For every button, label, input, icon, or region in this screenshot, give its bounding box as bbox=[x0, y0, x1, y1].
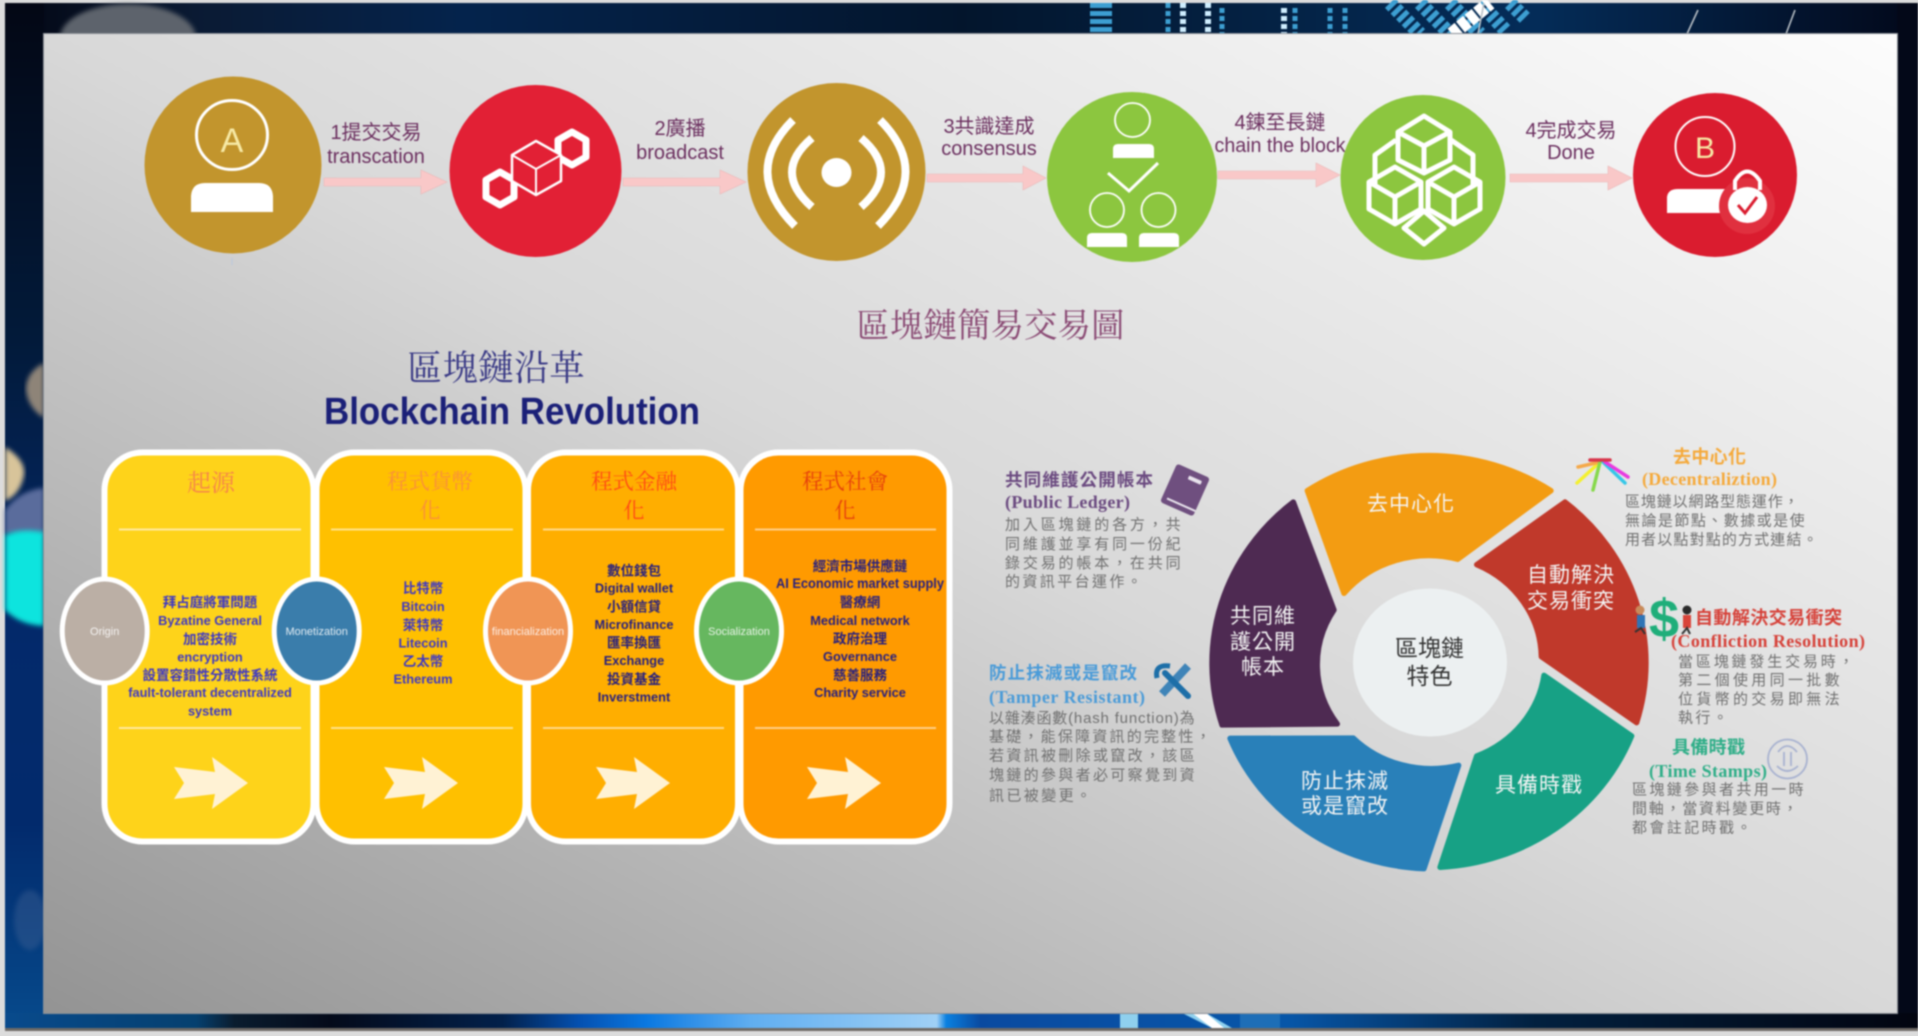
label: step 2 bbox=[636, 117, 724, 164]
text block: decentralization bbox=[1625, 447, 1820, 548]
arrow 4 bbox=[1218, 163, 1340, 187]
card: origin: Byzatine General bbox=[158, 613, 262, 628]
text block: conflict resolution: 位貨幣的交易即無法 bbox=[1678, 690, 1842, 708]
icon: dollar sign with figures: $ bbox=[1649, 589, 1679, 649]
text block: time stamps: 具備時戳 bbox=[1672, 738, 1745, 758]
icon: book bbox=[1160, 463, 1210, 517]
label: step 3: consensus bbox=[941, 138, 1037, 160]
card: socialization: 化 bbox=[834, 499, 856, 523]
node: origin: Origin bbox=[90, 626, 119, 638]
card: monetization: Ethereum bbox=[393, 672, 453, 686]
heading: Blockchain Revolution: 區塊鏈沿革 bbox=[407, 348, 585, 388]
step icon: broadcast bbox=[748, 83, 926, 261]
card: origin: encryption bbox=[177, 650, 243, 664]
text block: time stamps: (Time Stamps) bbox=[1649, 761, 1767, 782]
step icon: user B bbox=[1633, 93, 1797, 257]
arrow 3 bbox=[927, 166, 1046, 190]
card: monetization: 程式貨幣 bbox=[387, 470, 473, 494]
text block: tamper resistant bbox=[989, 663, 1213, 804]
node: financialization bbox=[486, 579, 570, 683]
card: monetization: 萊特幣 bbox=[403, 617, 444, 633]
card: socialization: 醫療網 bbox=[840, 594, 880, 610]
card: origin: 拜占庭將軍問題 bbox=[163, 594, 258, 610]
card: socialization: 經濟市場供應鏈 bbox=[813, 558, 908, 574]
text block: conflict resolution: 執行。 bbox=[1678, 710, 1730, 726]
text block: decentralization: 無論是節點、數據或是使 bbox=[1625, 512, 1807, 530]
card: socialization: Medical network bbox=[810, 613, 911, 628]
text block: public ledger: 同維護並享有同一份紀 bbox=[1005, 536, 1183, 553]
text block: tamper resistant: 以雜湊函數(hash function)為 bbox=[989, 710, 1197, 727]
text block: decentralization: (Decentraliztion) bbox=[1642, 469, 1777, 490]
icon: radiating arrows bbox=[1577, 460, 1628, 490]
card: monetization: 乙太幣 bbox=[403, 653, 444, 669]
text block: decentralization: 區塊鏈以網路型態運作， bbox=[1625, 494, 1801, 510]
node: socialization: Socialization bbox=[708, 626, 770, 638]
text block: public ledger bbox=[1005, 470, 1183, 590]
card: financialization: Exchange bbox=[604, 653, 664, 668]
card: socialization: AI Economic market supply bbox=[776, 576, 944, 591]
icon: dollar sign with figures bbox=[1635, 589, 1692, 649]
text block: decentralization: 去中心化 bbox=[1673, 447, 1746, 467]
segment label: tamper resistant: 防止抹滅 bbox=[1301, 770, 1389, 793]
label: step 3: 3共識達成 bbox=[943, 115, 1035, 138]
segment label: conflict resolution: 交易衝突 bbox=[1527, 590, 1615, 613]
card: socialization: 政府治理 bbox=[833, 630, 887, 646]
card: origin: 加密技術 bbox=[183, 631, 237, 647]
arrow 5 bbox=[1510, 166, 1632, 190]
step icon: user B: B bbox=[1695, 132, 1715, 165]
node: monetization: Monetization bbox=[286, 626, 348, 638]
title: simple transaction diagram: 區塊鏈簡易交易圖 bbox=[856, 308, 1124, 345]
text block: tamper resistant: (Tamper Resistant) bbox=[989, 687, 1145, 708]
card: financialization: 投資基金 bbox=[607, 671, 661, 687]
segment label: time stamps: 具備時戳 bbox=[1495, 774, 1583, 797]
text block: conflict resolution: 自動解決交易衝突 bbox=[1695, 607, 1842, 628]
segment label: tamper resistant: 或是竄改 bbox=[1301, 795, 1389, 818]
card: socialization: Charity service bbox=[814, 685, 906, 700]
card: origin: 起源 bbox=[187, 470, 236, 497]
card: origin: fault-tolerant decentralized bbox=[128, 685, 292, 700]
card: socialization: Governance bbox=[823, 649, 897, 664]
text block: conflict resolution bbox=[1671, 607, 1865, 726]
card: financialization: 程式金融 bbox=[591, 470, 677, 494]
card: monetization: Litecoin bbox=[398, 636, 448, 650]
arrow 1 bbox=[324, 170, 447, 194]
label: step 3 bbox=[941, 115, 1037, 160]
label: step 2: 2廣播 bbox=[654, 117, 706, 140]
node: financialization: financialization bbox=[492, 626, 564, 638]
text block: public ledger: 的資訊平台運作。 bbox=[1005, 574, 1144, 590]
text block: tamper resistant: 塊鏈的參與者必可察覺到資 bbox=[989, 766, 1197, 784]
segment label: public ledger bbox=[1230, 605, 1296, 679]
segment label: public ledger: 共同維 bbox=[1230, 605, 1296, 628]
step icon: user A bbox=[144, 76, 322, 265]
label: step 4: chain the block bbox=[1214, 135, 1346, 157]
text block: time stamps: 區塊鏈參與者共用一時 bbox=[1632, 782, 1806, 798]
label: step 5: Done bbox=[1547, 142, 1595, 164]
card: financialization: 化 bbox=[623, 499, 645, 523]
text block: time stamps bbox=[1632, 738, 1806, 836]
segment label: decentralization: 去中心化 bbox=[1367, 493, 1455, 516]
text block: public ledger: (Public Ledger) bbox=[1005, 492, 1130, 513]
label: step 1: transcation bbox=[327, 146, 425, 168]
label: step 5: 4完成交易 bbox=[1525, 119, 1617, 142]
label: step 1 bbox=[327, 121, 425, 168]
arrow 2 bbox=[623, 170, 746, 194]
segment shapes bbox=[1212, 456, 1646, 869]
label: step 4: 4鍊至長鏈 bbox=[1234, 111, 1326, 134]
text block: tamper resistant: 基礎，能保障資訊的完整性， bbox=[989, 728, 1213, 746]
heading: Blockchain Revolution: Blockchain Revolution bbox=[324, 391, 700, 433]
card: socialization: 慈善服務 bbox=[833, 667, 887, 683]
text block: conflict resolution: 當區塊鏈發生交易時， bbox=[1678, 652, 1856, 670]
label: step 1: 1提交交易 bbox=[330, 121, 422, 144]
text block: conflict resolution: (Confliction Resolution) bbox=[1671, 631, 1865, 652]
icon: wrench and pencil bbox=[1157, 666, 1188, 696]
text block: public ledger: 錄交易的帳本，在共同 bbox=[1005, 554, 1183, 572]
text block: public ledger: 共同維護公開帳本 bbox=[1005, 470, 1153, 490]
step icon: chained cubes bbox=[1340, 95, 1506, 260]
label: step 5 bbox=[1525, 119, 1617, 164]
center hub bbox=[1353, 588, 1507, 736]
card: monetization: 化 bbox=[419, 499, 441, 523]
icon: time stamp seal bbox=[1768, 740, 1807, 778]
revolution timeline bbox=[62, 452, 949, 842]
card: origin: system bbox=[188, 704, 232, 718]
segment label: tamper resistant bbox=[1301, 770, 1389, 818]
transaction flow diagram bbox=[144, 76, 1797, 265]
label: step 4 bbox=[1214, 111, 1346, 157]
text block: time stamps: 都會註記時戳。 bbox=[1632, 820, 1754, 836]
card: socialization bbox=[740, 452, 950, 842]
text block: decentralization: 用者以點對點的方式連結。 bbox=[1625, 532, 1820, 548]
label: step 2: broadcast bbox=[636, 142, 724, 164]
step icon: consensus bbox=[1047, 92, 1217, 262]
node: socialization bbox=[696, 579, 782, 683]
heading: Blockchain Revolution bbox=[324, 348, 700, 433]
card: financialization: 小額信貸 bbox=[607, 598, 661, 614]
step icon: user A: A bbox=[221, 122, 244, 160]
card: origin: 設置容錯性分散性系統 bbox=[142, 667, 278, 683]
donut chart: blockchain features bbox=[1212, 456, 1646, 869]
card: socialization: 程式社會 bbox=[802, 470, 888, 494]
card: financialization: 匯率換匯 bbox=[607, 634, 661, 650]
card: financialization: Digital wallet bbox=[595, 580, 674, 596]
segment label: conflict resolution: 自動解決 bbox=[1527, 564, 1615, 587]
segment label: public ledger: 護公開 bbox=[1230, 631, 1296, 654]
card: origin bbox=[104, 452, 314, 842]
segment label: conflict resolution bbox=[1527, 564, 1615, 613]
segment label: public ledger: 帳本 bbox=[1241, 656, 1285, 679]
text block: time stamps: 間軸，當資料變更時， bbox=[1632, 800, 1800, 818]
center hub: 區塊鏈 bbox=[1395, 635, 1464, 661]
card: monetization: Bitcoin bbox=[401, 599, 445, 614]
card: monetization: 比特幣 bbox=[403, 580, 444, 596]
text block: tamper resistant: 訊已被變更。 bbox=[989, 788, 1093, 804]
card: financialization: 數位錢包 bbox=[607, 562, 661, 578]
card: financialization bbox=[528, 452, 738, 842]
text block: conflict resolution: 第二個使用同一批數 bbox=[1678, 671, 1842, 689]
text block: tamper resistant: 防止抹滅或是竄改 bbox=[989, 663, 1138, 683]
text block: tamper resistant: 若資訊被刪除或竄改，該區 bbox=[989, 748, 1197, 764]
card: monetization bbox=[316, 452, 526, 842]
text block: public ledger: 加入區塊鏈的各方，共 bbox=[1005, 516, 1183, 534]
node: origin bbox=[62, 579, 147, 683]
card: financialization: Microfinance bbox=[595, 617, 673, 632]
center hub: 特色 bbox=[1406, 663, 1452, 689]
card: financialization: Inverstment bbox=[598, 690, 671, 704]
node: monetization bbox=[274, 579, 359, 683]
step icon: block nodes bbox=[450, 85, 622, 257]
